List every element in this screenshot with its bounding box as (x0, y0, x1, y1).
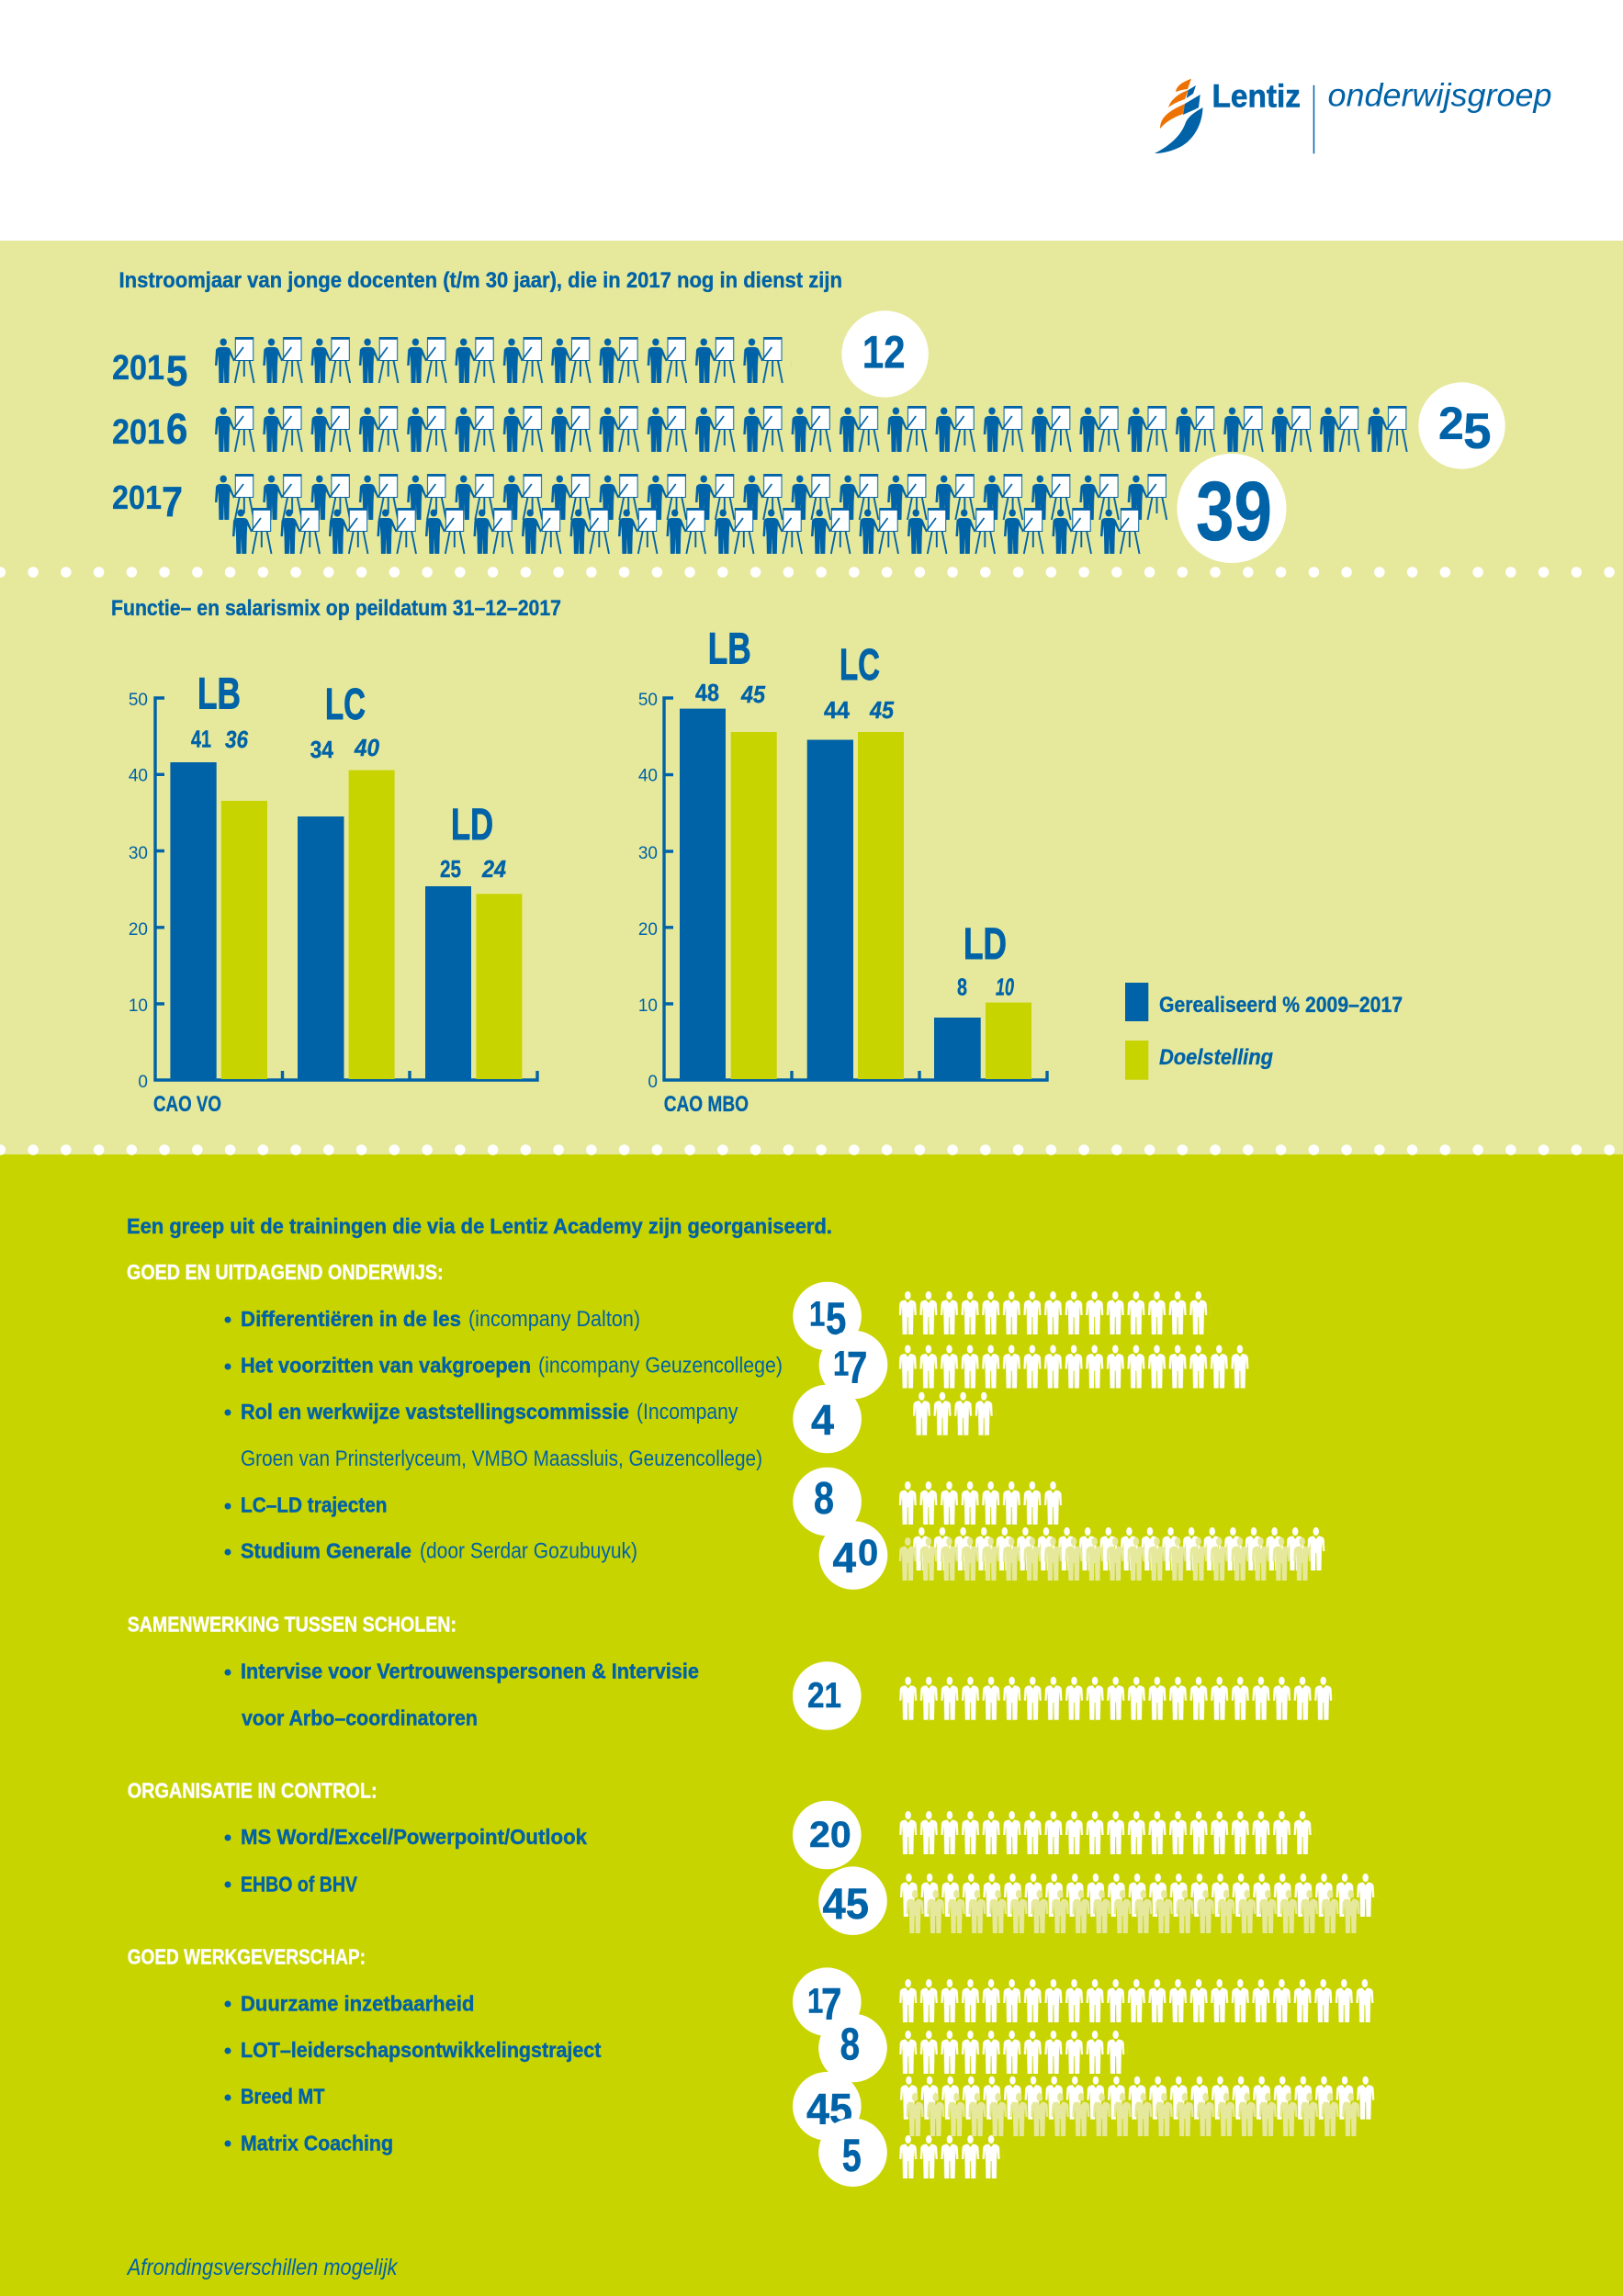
white back row x23 (900, 1874, 1378, 1918)
count circle 45 (793, 2072, 862, 2141)
training: matrix coaching: Matrix Coaching (241, 2131, 393, 2155)
training: vaststellingscommissie: Groen van Prinsterlyceum, VMBO Maassluis, Geuzencollege) (241, 1446, 762, 1471)
legend item: doelstelling (1125, 1041, 1273, 1080)
people row x23 (899, 1979, 1377, 2023)
count circle 5: 5 (842, 2130, 862, 2181)
training: EHBO: EHBO of BHV (241, 1872, 358, 1896)
white back row x23 (900, 2077, 1378, 2121)
training: vaststellingscommissie: (Incompany (637, 1400, 738, 1424)
axis labels: 40 (129, 766, 148, 786)
legend item: doelstelling: Doelstelling (1159, 1045, 1273, 1070)
count circle 12: 12 (862, 327, 906, 378)
training: duurzame inzetbaarheid: Duurzame inzetbaarheid (241, 1991, 474, 2015)
year label 2017: 7 (162, 478, 183, 526)
bars LB: 41 (191, 726, 211, 753)
axis labels: 50 (638, 691, 658, 710)
count circle 17: 1 (807, 1983, 823, 2020)
count circle 40: 0 (858, 1533, 878, 1573)
training: differentiëren: Differentiëren in de les (241, 1307, 461, 1331)
teacher icons x12 (215, 337, 792, 384)
bars LB: 36 (225, 726, 248, 753)
bars LB: LB (197, 670, 241, 719)
year label 2015: 5 (166, 348, 187, 396)
count circle 17 (819, 1331, 887, 1399)
row: 2017 teachers (112, 454, 1286, 563)
teacher icons x25 (215, 406, 1416, 453)
bars LC: LC (840, 641, 880, 690)
axis labels (129, 691, 148, 1092)
count circle 12 (841, 310, 929, 398)
training: studium generale (224, 1539, 637, 1564)
teacher icons x19 (232, 508, 1148, 555)
axis labels: 50 (129, 691, 148, 710)
training: MS office: MS Word/Excel/Powerpoint/Outlook (241, 1825, 587, 1849)
training: studium generale: Studium Generale (241, 1539, 411, 1563)
category label: CAO VO (153, 1092, 221, 1117)
axis labels: 10 (638, 996, 658, 1016)
bars LD: 24 (481, 855, 506, 883)
count circle 17: 1 (833, 1345, 849, 1383)
background: bright green band (0, 1154, 1623, 2296)
count circle 4: 4 (811, 1396, 834, 1444)
training: differentiëren (224, 1307, 640, 1332)
count circle 8: 8 (840, 2020, 860, 2070)
people row x45 (900, 2077, 1378, 2137)
people row x11 (899, 2031, 1128, 2075)
axis labels: 20 (638, 920, 658, 940)
count circle 8 (818, 2014, 887, 2082)
training: breed MT: Breed MT (241, 2085, 325, 2109)
training: voorzitten vakgroepen: (incompany Geuzencollege) (538, 1354, 783, 1379)
category heading: organisatie: ORGANISATIE IN CONTROL: (128, 1779, 378, 1803)
count circle 15: 5 (826, 1294, 846, 1345)
training: vaststellingscommissie (224, 1400, 762, 1471)
legend (1125, 983, 1403, 1080)
people row x40 (899, 1527, 1328, 1581)
bars LB (680, 625, 777, 1079)
bars LD (425, 801, 522, 1079)
axis labels: 10 (129, 996, 148, 1016)
training: intervisie: voor Arbo–coordinatoren (242, 1705, 478, 1729)
category heading: goed en uitdagend onderwijs: GOED EN UITDAGEND ONDERWIJS: (127, 1260, 444, 1284)
bars LD: LD (964, 920, 1007, 969)
count circle 40: 4 (832, 1534, 856, 1581)
training: vaststellingscommissie: Rol en werkwijze vaststellingscommissie (241, 1400, 629, 1424)
year label 2017: 201 (112, 479, 162, 516)
bar chart: CAO VO (129, 670, 537, 1117)
people row x17 (899, 1345, 1252, 1389)
bars LB: LB (708, 625, 751, 674)
legend item: gerealiseerd (1125, 983, 1403, 1021)
count circle 25 (1418, 382, 1505, 469)
chart axes (664, 698, 1047, 1080)
row: 2015 teachers (112, 310, 929, 398)
year label 2015: 201 (112, 347, 164, 387)
people row x15 (899, 1291, 1211, 1335)
background: pale green band (0, 241, 1623, 1154)
heading: functie- en salarismix: Functie– en salarismix op peildatum 31–12–2017 (111, 596, 561, 621)
training: intervisie: Intervise voor Vertrouwenspersonen & Intervisie (241, 1660, 699, 1683)
white back row x20 (913, 1527, 1328, 1571)
count circle 20 (793, 1801, 862, 1869)
bars LC (807, 641, 904, 1079)
count circle 17 (793, 1967, 862, 2036)
count circle 4 (793, 1385, 862, 1453)
category heading: samenwerking: SAMENWERKING TUSSEN SCHOLEN: (128, 1613, 456, 1637)
background: white header band (0, 0, 1623, 241)
pale front row x22 (907, 1890, 1363, 1934)
count circle 21: 21 (807, 1676, 841, 1716)
bars LC: LC (325, 681, 366, 729)
training: studium generale: (door Serdar Gozubuyuk) (420, 1539, 637, 1564)
footnote: Afrondingsverschillen mogelijk (126, 2255, 399, 2280)
heading: trainingen: Een greep uit de trainingen die via de Lentiz Academy zijn georganiseerd. (127, 1214, 832, 1238)
axis labels: 30 (638, 844, 658, 863)
people row x5 (899, 2135, 1003, 2179)
year label 2016: 201 (112, 411, 164, 451)
people row x8 (899, 1481, 1065, 1525)
count circle 8 (793, 1468, 862, 1536)
training: differentiëren: (incompany Dalton) (468, 1307, 640, 1332)
count circle 40 (819, 1521, 887, 1590)
count circle 25: 2 (1438, 398, 1464, 449)
row: 2016 teachers (112, 382, 1505, 469)
count circle 17: 7 (847, 1343, 867, 1393)
bars LC: 45 (869, 696, 894, 724)
category heading: werkgeverschap: GOED WERKGEVERSCHAP: (128, 1944, 366, 1968)
bars LB (170, 670, 267, 1079)
count circle 45: 45 (823, 1879, 869, 1928)
count circle 45: 45 (806, 2085, 852, 2133)
training: voorzitten vakgroepen (224, 1354, 783, 1379)
training: LC-LD trajecten: LC–LD trajecten (241, 1493, 388, 1517)
count circle 15 (793, 1282, 862, 1350)
axis labels: 0 (138, 1073, 148, 1092)
bar chart: CAO MBO (638, 625, 1047, 1117)
bars LC: 40 (354, 734, 380, 761)
logo wordmark: Lentiz (1212, 79, 1301, 115)
count circle 21 (793, 1661, 862, 1730)
bars LB: 45 (740, 681, 765, 708)
count circle 15: 1 (809, 1295, 825, 1334)
logo: Lentiz onderwijsgroep (1155, 78, 1552, 153)
teacher icons x20 (215, 474, 1176, 521)
count circle 45 (818, 1866, 887, 1935)
bars LC (298, 681, 395, 1079)
heading: instroomjaar: Instroomjaar van jonge docenten (t/m 30 jaar), die in 2017 nog in dienst zijn (119, 268, 842, 293)
axis labels: 40 (638, 766, 658, 786)
people row x20 (899, 1811, 1314, 1855)
category label: CAO MBO (664, 1092, 749, 1117)
training: intervisie (224, 1660, 699, 1729)
count circle 5 (818, 2118, 887, 2187)
people row x21 (899, 1677, 1336, 1721)
axis labels: 0 (648, 1073, 658, 1092)
axis labels (638, 691, 658, 1092)
people row x45 (900, 1874, 1378, 1934)
bars LC: 34 (310, 736, 333, 763)
legend item: gerealiseerd: Gerealiseerd % 2009–2017 (1159, 993, 1403, 1018)
chart axes (155, 698, 537, 1080)
count circle 25: 5 (1463, 402, 1492, 459)
axis labels: 20 (129, 920, 148, 940)
count circle 39: 39 (1196, 465, 1272, 558)
training: LOT: LOT–leiderschapsontwikkelingstraject (241, 2038, 602, 2062)
count circle 20: 20 (809, 1815, 851, 1855)
bars LC: 44 (824, 696, 851, 724)
bars LD: 8 (957, 974, 967, 1001)
bars LB: 48 (695, 679, 719, 706)
people row x4 (913, 1392, 996, 1436)
logo tagline: onderwijsgroep (1328, 78, 1552, 114)
pale front row x22 (907, 2093, 1363, 2137)
count circle 39 (1178, 454, 1286, 563)
bars LD: 10 (996, 974, 1014, 1001)
count circle 17: 7 (821, 1979, 841, 2030)
icon: Lentiz flame mark (1155, 79, 1203, 153)
training: voorzitten vakgroepen: Het voorzitten van vakgroepen (241, 1354, 531, 1378)
pale front row x20 (899, 1537, 1314, 1581)
bars LD: 25 (440, 855, 461, 883)
axis labels: 30 (129, 844, 148, 863)
year label 2016: 6 (166, 406, 187, 454)
bars LD: LD (451, 801, 493, 850)
count circle 8: 8 (814, 1474, 834, 1524)
bars LD (934, 920, 1031, 1079)
